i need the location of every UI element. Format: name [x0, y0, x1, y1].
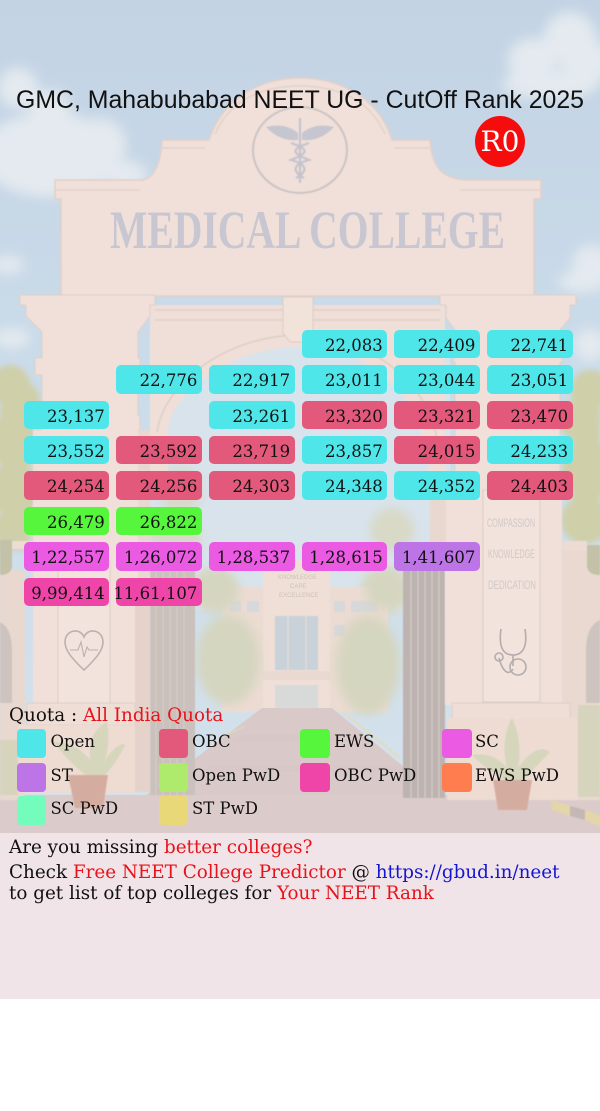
legend [17, 729, 559, 825]
row 2: 23,051 [510, 371, 568, 390]
row 4: 24,233 [510, 442, 568, 461]
row 4: 23,719 [232, 442, 290, 461]
centre sign lettering: EXCELLENCE [279, 593, 319, 599]
row 5: 24,303 [232, 477, 290, 496]
arch wall [150, 305, 445, 490]
medallion [253, 107, 347, 193]
legend: ST [50, 766, 73, 784]
round badge R0: R0 [481, 125, 519, 158]
row 2: 22,917 [232, 371, 290, 390]
distant college building [222, 560, 388, 712]
legend: EWS PwD [475, 766, 559, 784]
row 3: 23,320 [325, 407, 383, 426]
round badge R0 [475, 116, 525, 167]
row 3: 23,470 [510, 407, 568, 426]
side wings [0, 540, 600, 800]
row 5: 24,254 [47, 477, 105, 496]
row 4: 23,592 [140, 442, 197, 461]
row 2: 22,776 [140, 371, 197, 390]
clouds [0, 12, 600, 361]
legend: SC PwD [50, 799, 118, 818]
legend: ST PwD [192, 799, 258, 818]
row 5: 24,352 [418, 477, 475, 496]
row 2: 23,011 [325, 371, 383, 390]
icon: stethoscope [495, 629, 526, 675]
row 2: 23,044 [418, 371, 475, 390]
row 6: 26,479 [47, 513, 105, 532]
cutoff rank grid [24, 330, 573, 606]
centre sign lettering [278, 575, 319, 599]
row 4: 23,552 [47, 442, 105, 461]
pier lettering: KNOWLEDGE [488, 547, 535, 561]
row 5: 24,403 [510, 477, 568, 496]
title: GMC, Mahabubabad NEET UG - CutOff Rank 2025 [16, 87, 584, 114]
row 7: 1,26,072 [124, 548, 197, 567]
pier lettering [487, 516, 536, 592]
row 4: 24,015 [418, 442, 475, 461]
row 3: 23,321 [418, 407, 475, 426]
legend: OBC [192, 732, 231, 751]
left pier [20, 295, 155, 580]
row 7 [24, 542, 480, 571]
row 2 [116, 365, 573, 394]
keystone [283, 297, 313, 342]
row 5 [24, 471, 573, 500]
legend: EWS [334, 732, 374, 751]
kerbs [343, 712, 400, 758]
legend: Open [50, 732, 95, 751]
side trees [0, 365, 600, 550]
avenue trees [191, 568, 405, 715]
quota heading: Quota : All India Quota [9, 705, 223, 726]
row 6 [24, 507, 202, 535]
row 1: 22,083 [325, 336, 383, 355]
promo line 3: to get list of top colleges for Your NEET Rank [9, 883, 434, 904]
icon: heart pulse [65, 631, 103, 670]
centre sign lettering: KNOWLEDGE [278, 575, 317, 581]
row 8 [24, 578, 202, 606]
background illustration: medical college gate [0, 0, 600, 833]
row 7: 1,28,615 [309, 548, 383, 567]
row 3: 23,261 [232, 407, 290, 426]
row 1 [302, 330, 573, 358]
promo line 2: Check Free NEET College Predictor @ https://gbud.in/neet [9, 862, 559, 883]
row 8: 9,99,414 [31, 584, 105, 603]
legend: SC [475, 732, 499, 751]
pier lettering: COMPASSION [487, 516, 535, 530]
promo panel [0, 833, 600, 999]
row 3 [24, 401, 573, 429]
plants [52, 718, 550, 810]
row 3: 23,137 [47, 407, 105, 426]
right pier [440, 295, 576, 500]
legend: Open PwD [192, 766, 280, 784]
row 8: 11,61,107 [113, 584, 197, 603]
road and ground [0, 708, 450, 834]
sign block [18, 78, 577, 800]
sky through the arch [150, 330, 450, 610]
row 4: 23,857 [325, 442, 383, 461]
legend: OBC PwD [334, 766, 416, 784]
promo line 1: Are you missing better colleges? [9, 837, 312, 858]
row 7: 1,41,607 [402, 548, 475, 567]
gates [150, 570, 445, 798]
far trees behind the arch [149, 468, 414, 614]
row 1: 22,741 [510, 336, 568, 355]
row 6: 26,822 [140, 513, 197, 532]
row 5: 24,256 [140, 477, 197, 496]
row 7: 1,28,537 [217, 548, 290, 567]
row 5: 24,348 [325, 477, 383, 496]
row 4 [24, 436, 573, 464]
pier lettering: DEDICATION [488, 578, 536, 592]
centre sign lettering: CARE [290, 584, 307, 590]
row 7: 1,22,557 [31, 548, 105, 567]
row 1: 22,409 [418, 336, 475, 355]
bottom kerb stripes [552, 800, 600, 826]
